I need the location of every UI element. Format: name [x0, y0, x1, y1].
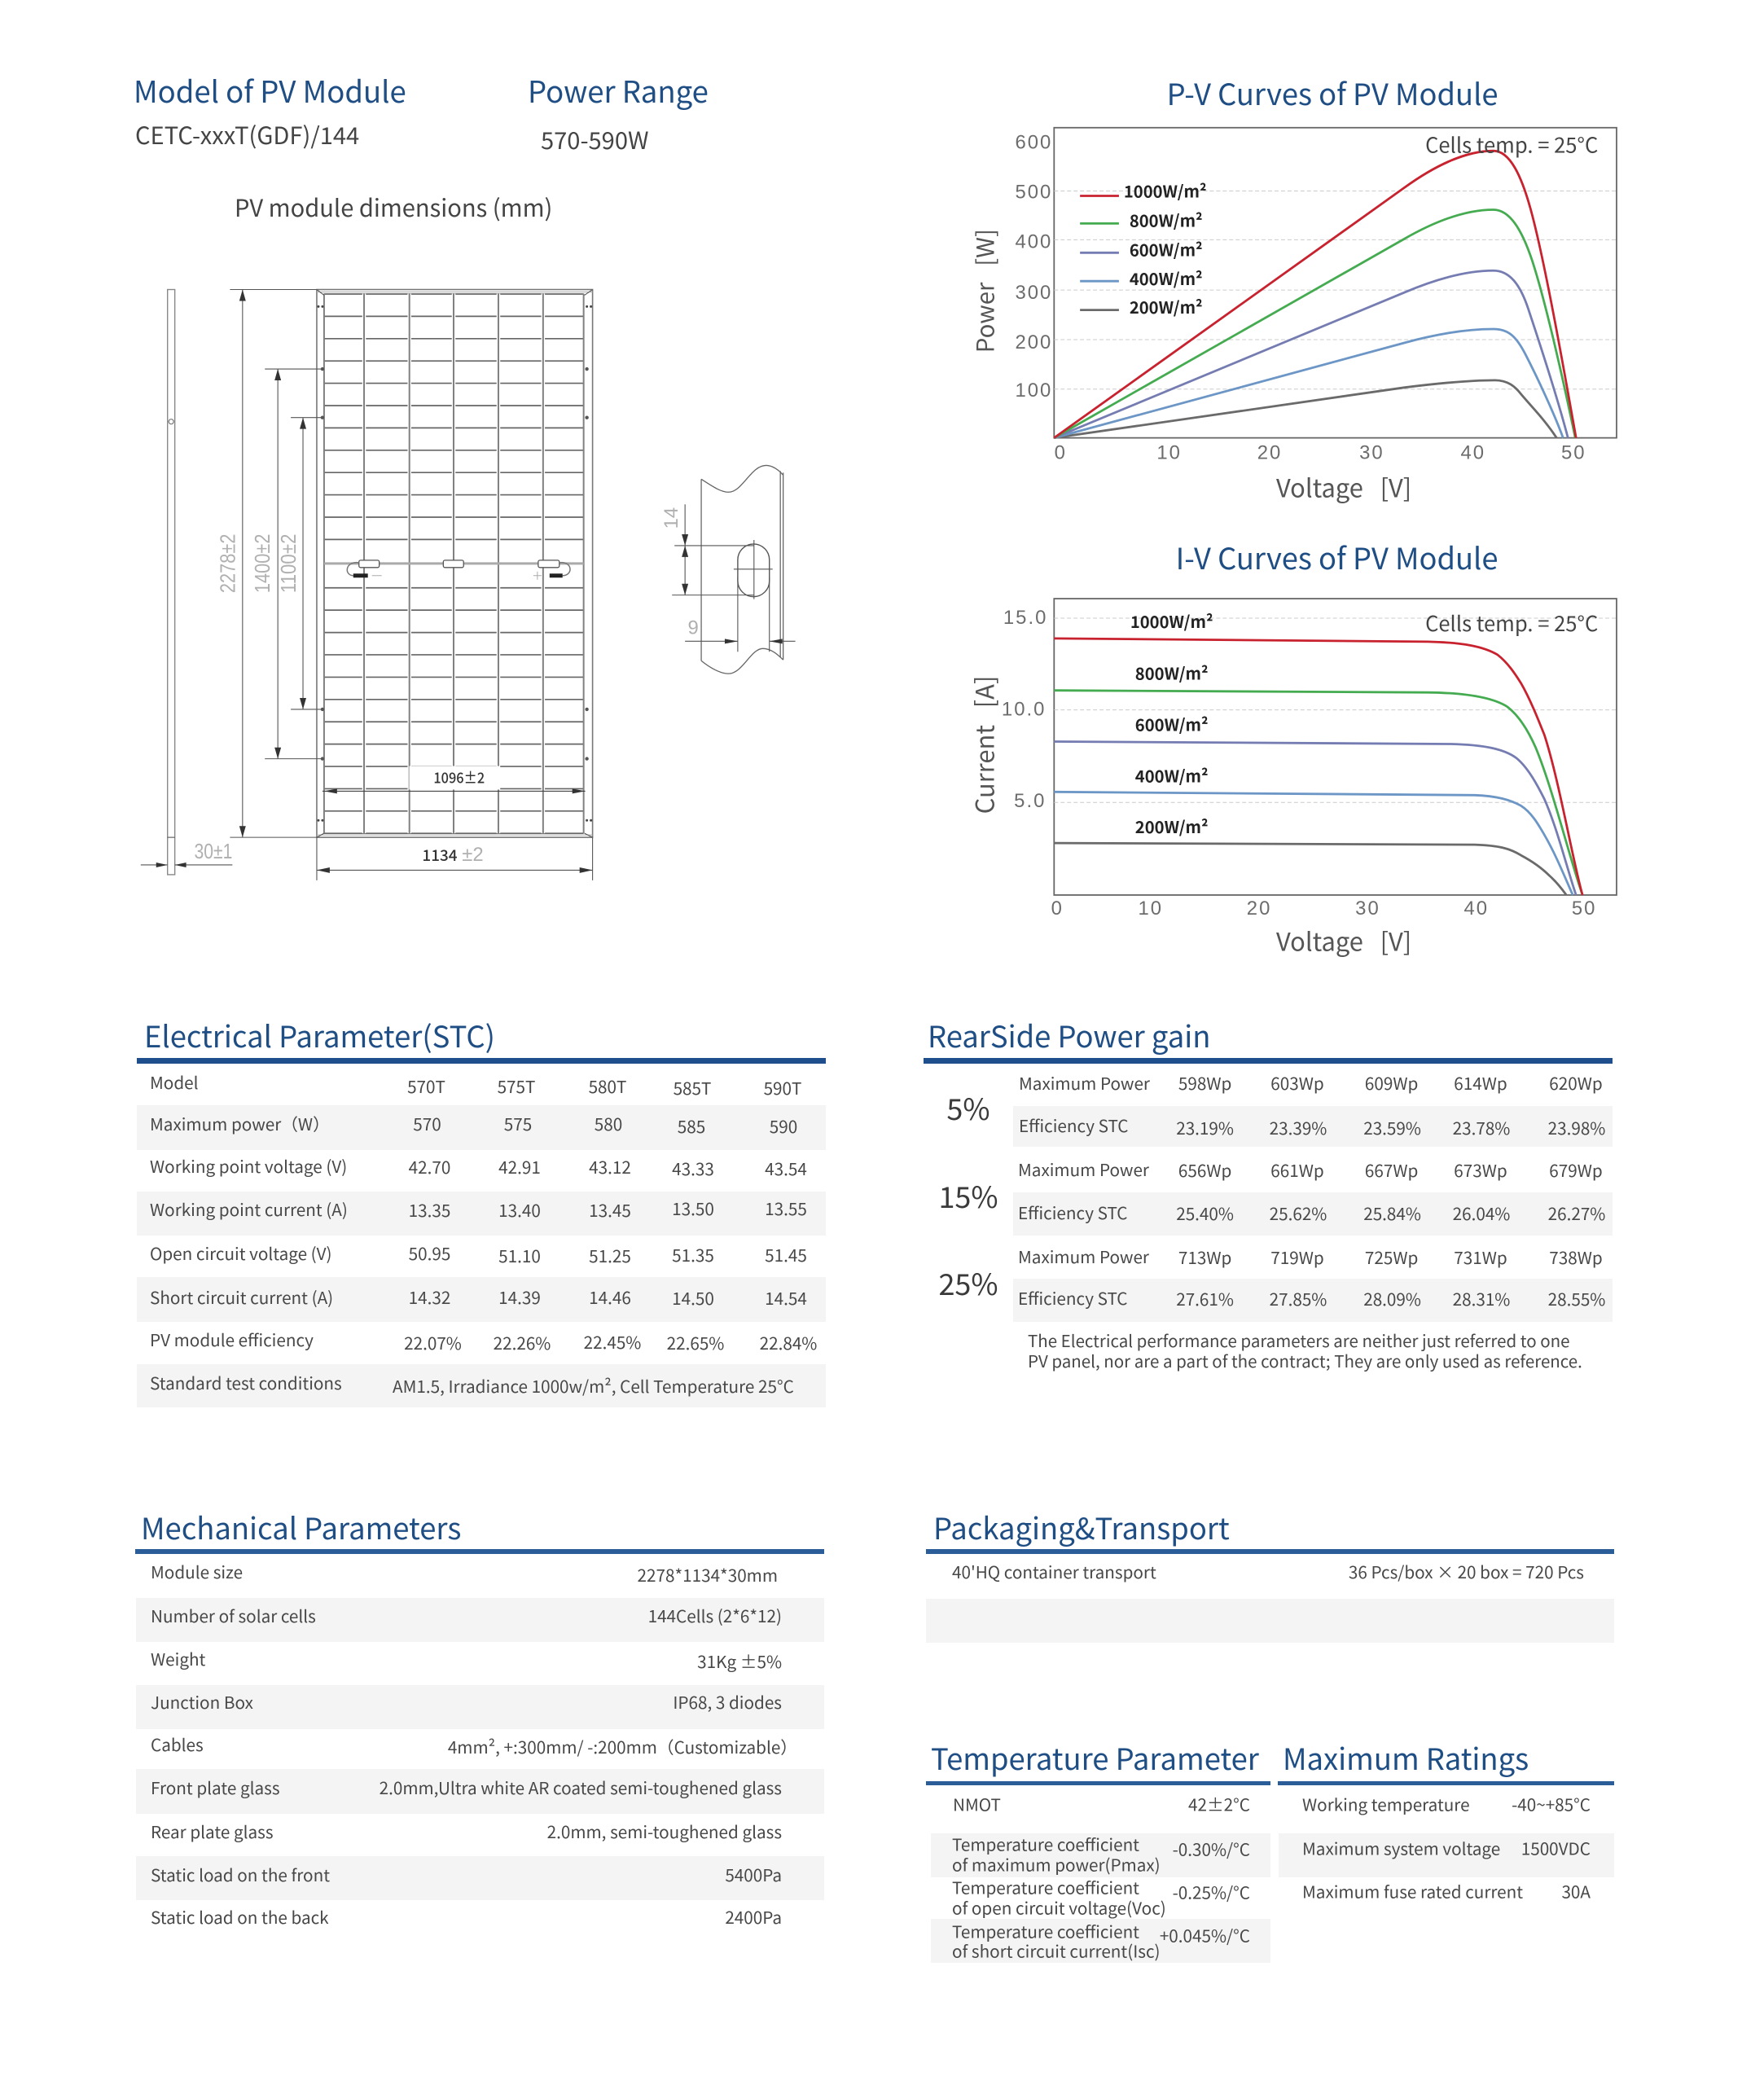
row: module size: 2278*1134*30mm — [638, 1562, 778, 1587]
x axis title: Voltage [V] — [1276, 467, 1411, 504]
row: working temperature — [1302, 1792, 1591, 1816]
panel: packaging and transport — [926, 1506, 1614, 1643]
row: junction box: IP68, 3 diodes — [673, 1689, 782, 1714]
grid lines and ticks: 400 — [1016, 230, 1052, 252]
drawing group — [141, 290, 796, 880]
legend: 800W/m² — [1130, 208, 1203, 231]
gain 25 percent: 713Wp — [1178, 1244, 1231, 1269]
cells temperature note: Cells temp. = 25°C — [1425, 608, 1598, 638]
row: rear plate glass — [151, 1819, 782, 1843]
heading: model: Model of PV Module — [134, 68, 406, 112]
row: maximum system voltage: Maximum system voltage — [1302, 1836, 1500, 1860]
chart title: I-V Curves of PV Module — [1176, 536, 1498, 578]
row: static load front: 5400Pa — [725, 1862, 782, 1886]
panel: model and power range — [134, 68, 709, 156]
grid lines and ticks: 300 — [1016, 282, 1052, 304]
row: coefficient of Voc: Temperature coefficient — [952, 1875, 1139, 1899]
row: container transport: 40'HQ container transport — [952, 1559, 1156, 1583]
row: working point current: 13.50 — [672, 1196, 714, 1220]
disclaimer note: The Electrical performance parameters are neither just referred to one — [1028, 1328, 1570, 1352]
curve labels: 600W/m² — [1135, 713, 1209, 736]
model value: CETC-xxxT(GDF)/144 — [135, 117, 359, 151]
heading rule — [137, 1058, 826, 1064]
gain 5 percent: 23.98% — [1548, 1115, 1605, 1139]
dimension: 1400 mounting — [252, 369, 323, 759]
grid lines and ticks: 50 — [1572, 898, 1596, 920]
row: maximum power: 590 — [770, 1113, 797, 1138]
y axis title: Current [A] — [965, 676, 1002, 814]
row: open circuit voltage: 51.10 — [498, 1243, 541, 1267]
row: short circuit current: Short circuit current (A) — [150, 1284, 333, 1309]
row: module size: Module size — [151, 1559, 243, 1583]
legend: 200W/m² — [1130, 295, 1203, 318]
row: static load front: Static load on the front — [151, 1862, 330, 1886]
row: working temperature: Working temperature — [1302, 1792, 1470, 1816]
row: junction box: Junction Box — [151, 1689, 253, 1714]
y axis title: Power [W] — [968, 229, 1002, 353]
row: maximum fuse rated current: Maximum fuse rated current — [1302, 1878, 1523, 1903]
curve labels: 400W/m² — [1135, 763, 1209, 787]
row: open circuit voltage: 51.45 — [765, 1242, 807, 1266]
row: open circuit voltage: 51.25 — [589, 1243, 631, 1267]
row: maximum power: 585 — [678, 1113, 705, 1138]
row: standard test conditions: AM1.5, Irradiance 1000w/m², Cell Temperature 25°C — [393, 1373, 794, 1398]
row: static load back: Static load on the back — [151, 1904, 329, 1929]
gain 15 percent: 25.62% — [1270, 1201, 1327, 1225]
row: container transport: 36 Pcs/box × 20 box = 720 Pcs — [1349, 1559, 1584, 1583]
row: static load back: 2400Pa — [725, 1904, 782, 1929]
row: maximum fuse rated current: 30A — [1561, 1878, 1591, 1903]
row: junction box — [151, 1689, 782, 1714]
row: NMOT: NMOT — [953, 1792, 1001, 1816]
junction boxes and cables — [347, 560, 570, 580]
row: module size — [151, 1559, 778, 1587]
legend: 600W/m² — [1130, 237, 1203, 261]
dimension: 30 thickness: 30±1 — [195, 841, 232, 863]
gain 25 percent: 725Wp — [1365, 1244, 1418, 1269]
curve labels: 200W/m² — [1135, 814, 1209, 838]
grid lines and ticks: 10.0 — [1002, 699, 1046, 721]
grid lines and ticks — [1002, 607, 1617, 920]
row: working point current: 13.40 — [498, 1197, 541, 1222]
gain 25 percent: 28.55% — [1548, 1286, 1605, 1310]
row: model — [150, 1069, 801, 1100]
row: model: 570T — [407, 1073, 445, 1098]
gain 15 percent: 673Wp — [1454, 1157, 1507, 1182]
gain 25 percent: 731Wp — [1454, 1244, 1507, 1269]
gain 15 percent: 15% — [938, 1174, 998, 1217]
panel: I-V curves chart — [965, 536, 1617, 959]
row: weight — [151, 1646, 782, 1673]
heading: Temperature Parameter — [931, 1736, 1260, 1779]
row: short circuit current: 14.46 — [589, 1284, 631, 1309]
dimension: 1134 width — [317, 837, 593, 880]
row: static load back — [151, 1904, 782, 1929]
mounting slot detail: 14 — [660, 507, 682, 529]
row: coefficient of Pmax — [952, 1831, 1250, 1876]
grid lines and ticks: 20 — [1257, 442, 1282, 464]
empty gray row — [926, 1599, 1614, 1643]
cells temperature note: Cells temp. = 25°C — [1425, 129, 1598, 160]
current curves — [1054, 639, 1582, 895]
grid lines and ticks: 200 — [1016, 331, 1052, 353]
panel: electrical parameter table — [137, 1014, 826, 1407]
row: coefficient of Pmax: of maximum power(Pmax) — [952, 1852, 1161, 1876]
gain 25 percent: 28.31% — [1453, 1286, 1510, 1310]
dimension: 2278 height — [217, 290, 317, 837]
grid lines and ticks: 100 — [1016, 380, 1052, 402]
gain 5 percent: Maximum Power — [1019, 1070, 1151, 1095]
row: working point voltage: 43.33 — [672, 1156, 714, 1180]
row: cables: Cables — [151, 1732, 204, 1756]
row: rear plate glass: Rear plate glass — [151, 1819, 274, 1843]
dimension: 1400 mounting: 1400±2 — [252, 534, 274, 593]
module front view — [317, 290, 593, 837]
row: container transport — [952, 1559, 1584, 1583]
gain 25 percent: Maximum Power — [1018, 1244, 1150, 1268]
gain 25 percent: 28.09% — [1363, 1286, 1421, 1310]
gain 5 percent: 614Wp — [1454, 1070, 1507, 1095]
disclaimer note — [1028, 1328, 1582, 1372]
row: standard test conditions — [150, 1370, 794, 1398]
row: cables: 4mm², +:300mm/ -:200mm（Customizable） — [448, 1734, 797, 1758]
row: coefficient of Isc: of short circuit current(Isc) — [952, 1938, 1160, 1963]
row: front plate glass — [151, 1775, 782, 1799]
row: short circuit current — [150, 1284, 807, 1310]
gain 5 percent: 620Wp — [1549, 1070, 1603, 1095]
gain 5 percent: 603Wp — [1270, 1070, 1324, 1095]
gain 5 percent: 23.19% — [1176, 1115, 1234, 1139]
chart frame — [1054, 599, 1617, 895]
alternating row backgrounds — [137, 1105, 826, 1407]
row: maximum system voltage — [1302, 1836, 1591, 1860]
mounting slot detail: 9 — [687, 617, 699, 639]
row: model: 580T — [589, 1073, 626, 1098]
row: open circuit voltage: Open circuit voltage (V) — [150, 1240, 332, 1265]
row: maximum power: 575 — [504, 1111, 532, 1135]
gain 5 percent: 23.78% — [1453, 1115, 1510, 1139]
grid lines and ticks: 500 — [1016, 181, 1052, 204]
grid lines and ticks: 30 — [1359, 442, 1384, 464]
row: module efficiency: 22.26% — [494, 1330, 551, 1354]
row: working point voltage: 42.70 — [409, 1154, 450, 1179]
row: working temperature: -40~+85°C — [1512, 1792, 1591, 1816]
dimension: 1100 mounting: 1100±2 — [278, 534, 301, 593]
grid lines and ticks: 50 — [1561, 442, 1586, 464]
row: front plate glass: Front plate glass — [151, 1775, 280, 1799]
grid lines and ticks: 5.0 — [1014, 790, 1046, 812]
power range value: 570-590W — [541, 122, 649, 156]
gain 15 percent: 26.27% — [1548, 1201, 1605, 1225]
row: cables — [151, 1732, 797, 1758]
row: working point current: Working point current (A) — [150, 1196, 348, 1221]
gain 25 percent: Efficiency STC — [1018, 1285, 1128, 1310]
gain 15 percent: 25.40% — [1176, 1201, 1234, 1225]
grid lines and ticks: 0 — [1055, 442, 1067, 464]
row: coefficient of Pmax: -0.30%/°C — [1173, 1836, 1250, 1860]
row: working point current: 13.35 — [409, 1197, 450, 1222]
heading: Maximum Ratings — [1283, 1736, 1529, 1779]
grid lines and ticks: 0 — [1051, 898, 1064, 920]
row: model: 575T — [498, 1073, 535, 1098]
heading: Mechanical Parameters — [141, 1506, 461, 1548]
panel: module dimensions drawing — [141, 190, 796, 880]
gain 15 percent: Efficiency STC — [1018, 1200, 1128, 1224]
grid lines and ticks: 10 — [1156, 442, 1182, 464]
row: module efficiency — [150, 1327, 817, 1354]
row: working point current: 13.45 — [589, 1197, 631, 1222]
row: module efficiency: 22.07% — [404, 1330, 462, 1354]
gain 25 percent: 25% — [938, 1262, 998, 1304]
row: coefficient of Isc — [952, 1919, 1250, 1963]
heading rule — [1278, 1781, 1614, 1785]
row: working point voltage: 43.12 — [589, 1154, 631, 1179]
gain 15 percent: 661Wp — [1270, 1157, 1324, 1182]
gain 15 percent: 656Wp — [1178, 1157, 1231, 1182]
row: open circuit voltage — [150, 1240, 807, 1267]
disclaimer note: PV panel, nor are a part of the contract; They are only used as reference. — [1028, 1348, 1582, 1372]
row: working point voltage: Working point voltage (V) — [150, 1153, 347, 1178]
gain 15 percent: 25.84% — [1363, 1201, 1421, 1225]
heading rule — [135, 1549, 824, 1554]
legend: 400W/m² — [1130, 266, 1203, 290]
dimension: 1100 mounting — [278, 418, 323, 709]
curve labels: 800W/m² — [1135, 661, 1209, 685]
panel: temperature parameter — [926, 1736, 1270, 1963]
curve labels — [1130, 609, 1213, 838]
grid lines and ticks: 40 — [1464, 898, 1489, 920]
row: standard test conditions: Standard test conditions — [150, 1370, 342, 1394]
row: coefficient of Isc: +0.045%/°C — [1160, 1922, 1250, 1947]
gain 15 percent — [938, 1157, 1605, 1225]
gain 15 percent: 667Wp — [1365, 1157, 1418, 1182]
curve labels: 1000W/m² — [1130, 609, 1213, 633]
gain 5 percent: 5% — [946, 1086, 990, 1129]
gain 25 percent — [938, 1244, 1605, 1310]
row: maximum power: 570 — [413, 1111, 441, 1135]
power curves — [1054, 151, 1576, 438]
row: coefficient of Voc: of open circuit voltage(Voc) — [952, 1894, 1166, 1919]
row: model: 590T — [764, 1075, 801, 1100]
gain 5 percent: 23.59% — [1363, 1115, 1421, 1139]
grid lines and ticks — [1016, 132, 1617, 464]
row: module efficiency: PV module efficiency — [150, 1327, 314, 1351]
row: working point voltage: 42.91 — [498, 1154, 541, 1179]
grid lines and ticks: 30 — [1355, 898, 1380, 920]
row: weight: Weight — [151, 1646, 206, 1670]
row: module efficiency: 22.65% — [667, 1330, 724, 1354]
gain 5 percent — [946, 1070, 1605, 1139]
row: model: Model — [150, 1069, 199, 1094]
row: static load front — [151, 1862, 782, 1886]
chart title: P-V Curves of PV Module — [1167, 72, 1499, 114]
dimensions heading: PV module dimensions (mm) — [235, 190, 552, 224]
row: maximum power: Maximum power（W） — [150, 1111, 330, 1135]
row: coefficient of Pmax: Temperature coefficient — [952, 1831, 1139, 1855]
row: model: 585T — [674, 1075, 711, 1100]
dimension: 1134 width: ±2 — [462, 844, 484, 866]
row: maximum system voltage: 1500VDC — [1521, 1836, 1591, 1860]
grid lines and ticks: 20 — [1247, 898, 1271, 920]
panel: mechanical parameters table — [135, 1506, 824, 1929]
gain 25 percent: 719Wp — [1270, 1244, 1324, 1269]
panel: rear side power gain table — [924, 1014, 1613, 1372]
dimension: 2278 height: 2278±2 — [217, 534, 239, 593]
gain 5 percent: 23.39% — [1270, 1115, 1327, 1139]
legend — [1080, 178, 1207, 318]
gain 5 percent: Efficiency STC — [1019, 1113, 1129, 1137]
heading rule — [926, 1781, 1270, 1785]
gain 25 percent: 27.61% — [1176, 1286, 1234, 1310]
row: number of solar cells: 144Cells (2*6*12) — [648, 1603, 782, 1627]
row: maximum power: 580 — [595, 1111, 622, 1135]
row backgrounds — [931, 1833, 1270, 1963]
row: short circuit current: 14.32 — [409, 1284, 450, 1309]
alternating row backgrounds — [136, 1598, 824, 1900]
row: maximum power — [150, 1111, 797, 1138]
gain 15 percent: Maximum Power — [1018, 1157, 1150, 1181]
row: open circuit voltage: 51.35 — [672, 1242, 714, 1266]
row: coefficient of Isc: Temperature coefficient — [952, 1919, 1139, 1943]
row: coefficient of Voc — [952, 1875, 1250, 1919]
heading: Electrical Parameter(STC) — [144, 1014, 495, 1056]
row: number of solar cells — [151, 1603, 782, 1627]
row: working point voltage: 43.54 — [765, 1156, 807, 1180]
row: working point voltage — [150, 1153, 807, 1180]
chart frame — [1054, 128, 1617, 438]
heading: power range: Power Range — [528, 68, 709, 112]
heading: RearSide Power gain — [928, 1014, 1210, 1056]
row backgrounds — [1013, 1106, 1613, 1322]
dimension: 1134 width: 1134 — [422, 844, 458, 866]
panel: maximum ratings — [1278, 1736, 1614, 1903]
row: short circuit current: 14.39 — [498, 1284, 541, 1309]
side view of module — [168, 290, 175, 875]
row: number of solar cells: Number of solar cells — [151, 1603, 316, 1627]
dimension: 30 thickness — [141, 841, 232, 867]
row background — [1279, 1833, 1614, 1877]
x axis title: Voltage [V] — [1276, 922, 1411, 959]
mounting slot detail — [660, 465, 796, 674]
row: working point current: 13.55 — [765, 1196, 807, 1220]
heading rule — [926, 1549, 1614, 1554]
gain 25 percent: 738Wp — [1549, 1244, 1603, 1269]
row: NMOT: 42±2°C — [1188, 1792, 1250, 1816]
row: module efficiency: 22.84% — [760, 1330, 817, 1354]
row: coefficient of Voc: -0.25%/°C — [1173, 1880, 1250, 1904]
grid lines and ticks: 15.0 — [1003, 607, 1047, 629]
dimension: 1096 inner width: 1096±2 — [433, 766, 485, 788]
row: short circuit current: 14.50 — [672, 1285, 714, 1310]
row: short circuit current: 14.54 — [765, 1285, 807, 1310]
dimension: 1096 inner width — [323, 766, 586, 793]
panel: P-V curves chart — [968, 72, 1617, 504]
heading rule — [924, 1058, 1613, 1064]
row: front plate glass: 2.0mm,Ultra white AR coated semi-toughened glass — [380, 1775, 782, 1799]
grid lines and ticks: 10 — [1138, 898, 1163, 920]
row: NMOT — [953, 1792, 1250, 1816]
row: weight: 31Kg ±5% — [697, 1648, 782, 1673]
grid lines and ticks: 600 — [1016, 132, 1052, 154]
gain 15 percent: 26.04% — [1453, 1201, 1510, 1225]
legend: 1000W/m² — [1124, 178, 1207, 203]
row: module efficiency: 22.45% — [584, 1329, 641, 1354]
heading: Packaging&Transport — [933, 1506, 1230, 1548]
row: open circuit voltage: 50.95 — [409, 1240, 450, 1265]
gain 15 percent: 679Wp — [1549, 1157, 1603, 1182]
gain 5 percent: 598Wp — [1178, 1070, 1231, 1095]
row: working point current — [150, 1196, 807, 1222]
grid lines and ticks: 40 — [1461, 442, 1485, 464]
gain 5 percent: 609Wp — [1365, 1070, 1418, 1095]
gain 25 percent: 27.85% — [1270, 1286, 1327, 1310]
row: rear plate glass: 2.0mm, semi-toughened glass — [547, 1819, 782, 1843]
